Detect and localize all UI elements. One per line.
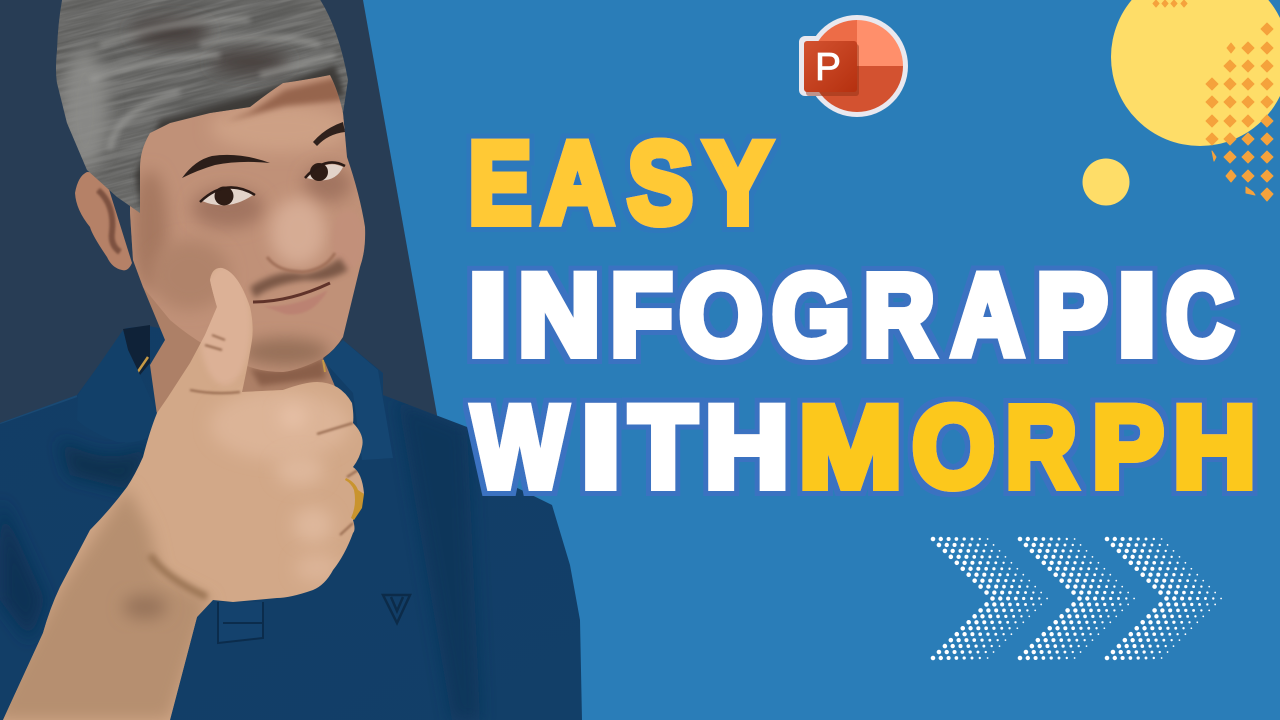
forehead shadow beneath hair [225, 78, 345, 122]
right collar [323, 340, 393, 460]
title line 1: EASY: S [628, 120, 693, 248]
left collar [77, 330, 157, 442]
nose highlight [270, 198, 326, 266]
mouth [253, 283, 330, 302]
title line 3: WITH: H [705, 384, 789, 512]
knuckle highlights [284, 409, 302, 425]
cheek left freckled [160, 241, 228, 309]
under-nose shade [250, 258, 348, 298]
hand top light [210, 390, 350, 460]
title line 3: MORPH: R [1006, 384, 1076, 512]
title line 2: INFOGRAPIC: O [680, 252, 762, 380]
title line 2: INFOGRAPIC: I [468, 252, 507, 380]
icon: dotted chevron arrows [933, 539, 1221, 658]
dark lower band [135, 65, 345, 215]
title line 3: WITH: I [581, 384, 620, 512]
title line 1: EASY: A [542, 120, 613, 248]
thumb tone [199, 265, 251, 385]
forearm tone [0, 487, 210, 720]
icon: PowerPoint logo [799, 15, 908, 117]
title line 2: INFOGRAPIC: N [518, 252, 600, 380]
ring [345, 478, 364, 520]
lower lip [263, 290, 328, 314]
dark patch [130, 18, 210, 46]
collar shadow [62, 444, 144, 490]
ear [75, 172, 132, 270]
decorative yellow circle small [1082, 158, 1130, 206]
left eye [200, 186, 255, 206]
forehead highlight [214, 108, 346, 151]
inner ear [98, 190, 120, 252]
decorative orange diamonds [1153, 0, 1273, 201]
title line 1: EASY: E [469, 120, 531, 248]
chevron 3 [1107, 539, 1221, 658]
title line 2: INFOGRAPIC: G [772, 252, 850, 380]
left temple shade [132, 170, 168, 290]
decorative yellow circle large [1111, 0, 1280, 146]
eye sockets [192, 188, 264, 228]
gold chain right [323, 360, 325, 372]
wrist dark spot [123, 595, 167, 619]
dark slanted panel [0, 0, 437, 500]
arm and fist [0, 260, 370, 720]
title line 2: INFOGRAPIC: I [1117, 252, 1156, 380]
neck [143, 287, 345, 415]
shirt [0, 320, 600, 720]
hair highlights [90, 20, 335, 150]
title line 2: INFOGRAPIC: A [952, 252, 1023, 380]
right eye [305, 162, 345, 181]
icon: PowerPoint logo: P [815, 46, 841, 89]
light side hair [61, 50, 109, 170]
title line 3: WITH: T [630, 384, 696, 512]
dark collar gap [123, 325, 150, 375]
right eyebrow [313, 122, 345, 146]
title line 2: INFOGRAPIC: R [864, 252, 934, 380]
logo V [383, 595, 410, 623]
title line 2: INFOGRAPIC: P [1036, 252, 1108, 380]
face [130, 75, 366, 372]
title line 2: INFOGRAPIC: F [611, 252, 672, 380]
nose outline [267, 253, 335, 272]
gold chain left [137, 357, 148, 373]
title line 1: EASY: Y [705, 120, 771, 248]
presenter photo illustration [0, 0, 600, 720]
shoulder seam [0, 396, 77, 423]
title line 2: INFOGRAPIC: C [1166, 252, 1233, 380]
chevron 2 [1020, 539, 1134, 658]
title line 3: WITH: W [473, 384, 567, 512]
title line 3: MORPH: O [912, 384, 994, 512]
left sleeve fold [0, 522, 44, 631]
title: EASY INFOGRAPIC WITH MORPH [468, 120, 1256, 512]
title line 3: MORPH: P [1092, 384, 1164, 512]
hair strand texture [56, 0, 348, 213]
shirt seam folds [404, 410, 477, 717]
title line 3: MORPH: H [1173, 384, 1256, 512]
wrist crease shadow [150, 555, 207, 597]
chin stubble [240, 338, 330, 366]
cheek right [362, 240, 365, 260]
neck shadow [250, 358, 326, 386]
finger creases [190, 335, 358, 535]
chevron 1 [933, 539, 1047, 658]
left eyebrow [182, 155, 270, 178]
hair [56, 0, 348, 213]
title line 3: MORPH: M [799, 384, 902, 512]
placket [218, 602, 263, 643]
